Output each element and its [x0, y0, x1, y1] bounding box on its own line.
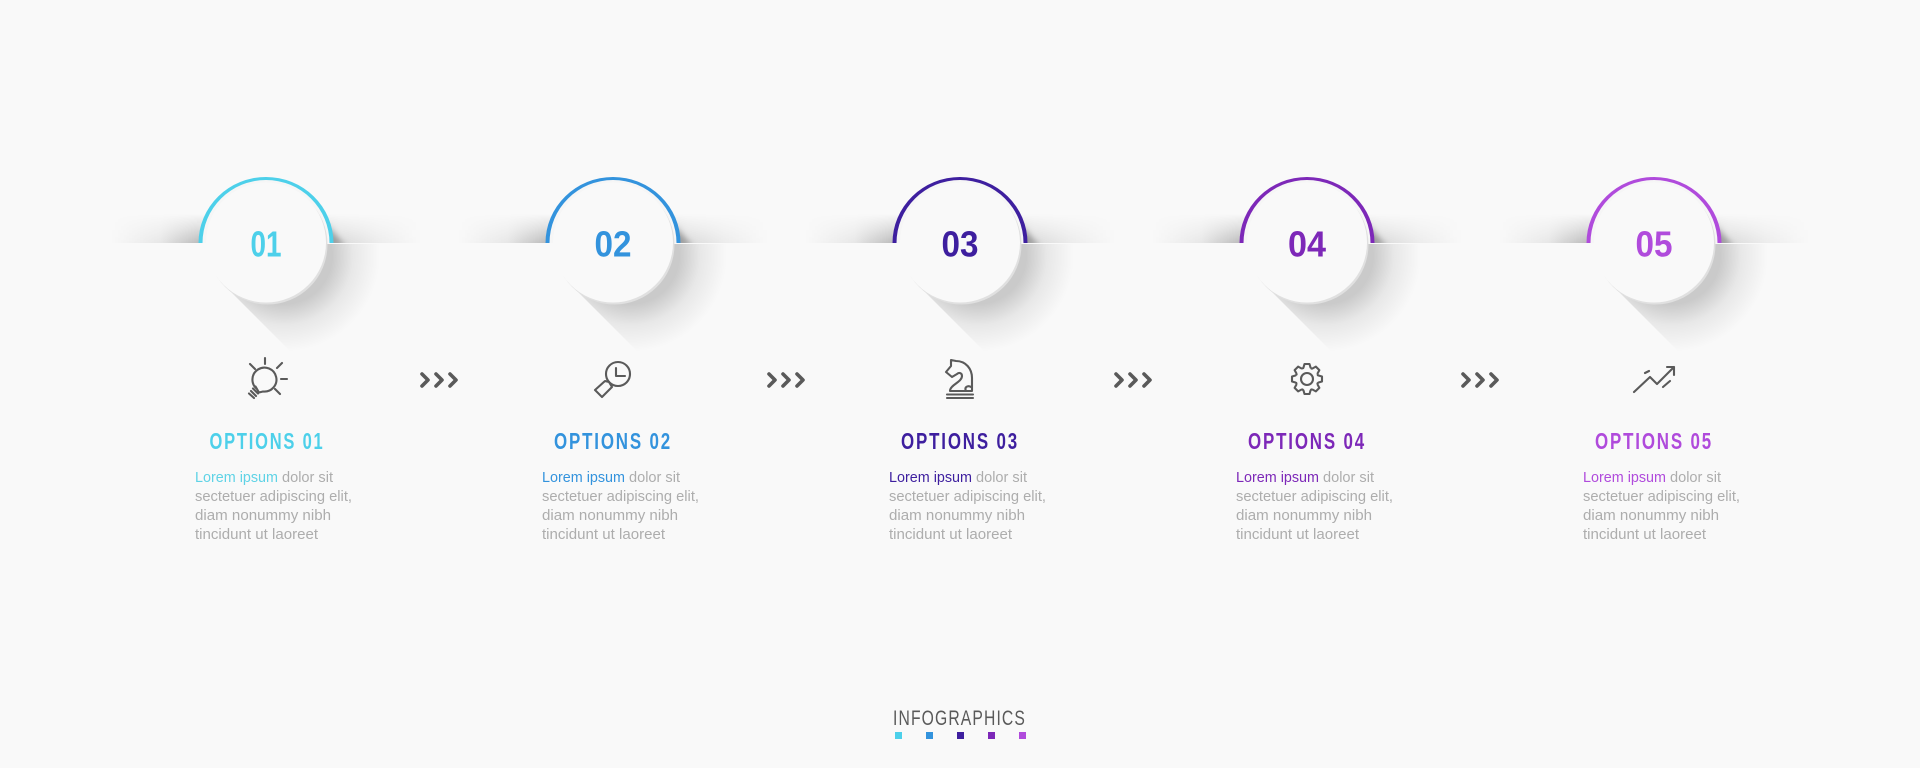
text block 2: diam nonummy nibh: [542, 507, 678, 524]
panel: step 1: [106, 177, 426, 543]
icon: chess knight: [946, 360, 973, 398]
ring backing 3: [893, 177, 1027, 243]
text block 3: dolor sit: [976, 469, 1028, 486]
heading 2: OPTIONS 02: [554, 428, 672, 454]
text block 4: diam nonummy nibh: [1236, 507, 1372, 524]
text block 1: diam nonummy nibh: [195, 507, 331, 524]
circle 4: [1247, 182, 1368, 304]
text block 3: [889, 469, 1046, 543]
circle 2: [553, 182, 674, 304]
ring backing 4: [1240, 177, 1374, 243]
text block 5: dolor sit: [1670, 469, 1722, 486]
icon: gear: [1292, 364, 1322, 394]
text block 4: sectetuer adipiscing elit,: [1236, 488, 1393, 505]
text block 5: tincidunt ut laoreet: [1583, 526, 1707, 543]
shadow 5: [1494, 213, 1814, 427]
ring arc 1: [198, 177, 334, 243]
footer title: INFOGRAPHICS: [893, 707, 1026, 730]
heading 4: OPTIONS 04: [1248, 428, 1366, 454]
circle 3: [900, 182, 1022, 304]
shadow 4: [1147, 213, 1467, 427]
shadow 1: [106, 213, 426, 427]
text block 1: [195, 469, 352, 543]
text block 3: diam nonummy nibh: [889, 507, 1025, 524]
panel: step 5: [1494, 177, 1814, 543]
text block 1: Lorem ipsum: [195, 469, 278, 486]
number 4: 04: [1288, 224, 1326, 264]
panel: step 4: [1147, 177, 1467, 543]
text block 5: [1583, 469, 1740, 543]
ring backing 1: [199, 177, 333, 243]
text block 1: tincidunt ut laoreet: [195, 526, 319, 543]
panel: step 2: [453, 177, 773, 543]
ring backing 5: [1587, 177, 1721, 243]
text block 4: [1236, 469, 1393, 543]
ring arc 3: [892, 177, 1028, 243]
ring arc 2: [546, 177, 680, 243]
number 2: 02: [594, 224, 632, 264]
arrow 2: [769, 374, 803, 386]
number 1: 01: [250, 224, 282, 264]
text block 5: Lorem ipsum: [1583, 469, 1666, 486]
text block 2: sectetuer adipiscing elit,: [542, 488, 699, 505]
arrow 3: [1116, 374, 1150, 386]
ring arc 4: [1240, 177, 1374, 243]
text block 5: diam nonummy nibh: [1583, 507, 1719, 524]
arrow 4: [1463, 374, 1497, 386]
text block 4: tincidunt ut laoreet: [1236, 526, 1360, 543]
circle 1: [206, 182, 328, 304]
text block 2: Lorem ipsum: [542, 469, 625, 486]
ring arc 5: [1586, 177, 1722, 243]
text block 3: sectetuer adipiscing elit,: [889, 488, 1046, 505]
number 5: 05: [1636, 224, 1672, 264]
footer colour squares: [895, 732, 1026, 739]
number 3: 03: [942, 224, 978, 264]
text block 1: sectetuer adipiscing elit,: [195, 488, 352, 505]
text block 2: [542, 469, 699, 543]
text block 2: dolor sit: [629, 469, 681, 486]
heading 3: OPTIONS 03: [901, 428, 1019, 454]
heading 1: OPTIONS 01: [210, 428, 324, 454]
text block 3: Lorem ipsum: [889, 469, 972, 486]
icon: growth chart: [1634, 367, 1674, 392]
shadow 2: [453, 213, 773, 427]
text block 4: dolor sit: [1323, 469, 1375, 486]
panel: step 3: [800, 177, 1120, 543]
text block 1: dolor sit: [282, 469, 334, 486]
text block 5: sectetuer adipiscing elit,: [1583, 488, 1740, 505]
text block 2: tincidunt ut laoreet: [542, 526, 666, 543]
heading 5: OPTIONS 05: [1595, 428, 1713, 454]
circle 5: [1594, 182, 1716, 304]
arrow 1: [422, 374, 456, 386]
text block 3: tincidunt ut laoreet: [889, 526, 1013, 543]
text block 4: Lorem ipsum: [1236, 469, 1319, 486]
shadow 3: [800, 213, 1120, 427]
ring backing 2: [546, 177, 680, 243]
icon: magnifier with clock: [595, 362, 630, 397]
icon: light bulb: [249, 358, 287, 398]
